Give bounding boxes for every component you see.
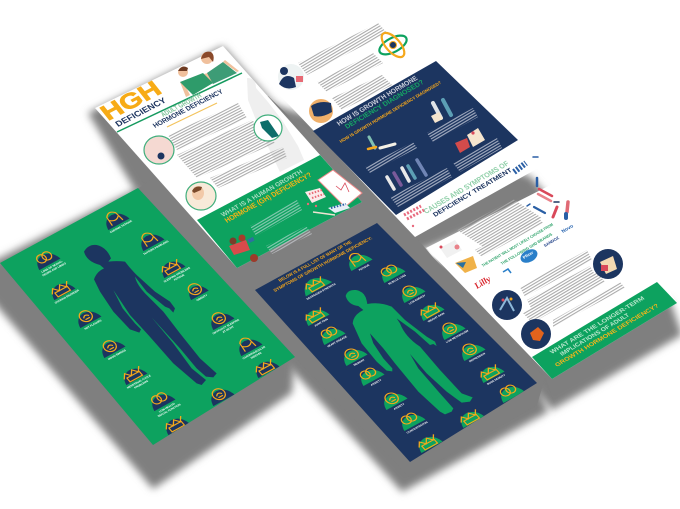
symptom icon 13: MEMORY [352,358,366,367]
symptom icon 10 [102,340,126,360]
symptom icon 15: ANXIETY [393,402,406,411]
illustration: man and woman [178,52,239,97]
symptom icon 13 [166,416,189,435]
symptom icon 7 [480,364,505,385]
symptom icon 1 [348,253,372,271]
panel: top left white page, adult growth hormone deficiency [95,46,362,268]
symptom icon 5: DIFFICULTY SLEEPING [211,318,240,335]
floating pills illustration [514,157,568,218]
panel: navy symptoms page [255,223,537,462]
symptom icon 3: FATIGUE [173,273,186,282]
illustration: family [229,234,258,262]
text block: diagnosis captions [365,108,502,207]
symptom icons [30,207,279,435]
symptom icon 6: DISEASE [250,351,263,360]
symptom icon 6 [239,338,266,360]
symptom icon 1: FATIGUE [358,263,371,272]
symptom icon 2: MUSCLE LOSS [387,273,407,286]
symptom icon 7: DESIRE AND LIBIDO [41,261,67,277]
heading: companies: THE FOLLOWING GHD BRANDS [500,232,554,266]
panel: green section, what is human growth hormone [197,155,362,268]
symptom icon 7: BONE DENSITY [486,373,506,386]
heading [549,296,661,368]
text block: treatment paragraphs [457,199,625,327]
symptom icon 10: MOOD SWINGS [107,348,127,361]
symptom icon 11: MENSTRUAL CYCLE [126,374,152,390]
icon: hospital logos [440,240,462,258]
symptom icon 10 [304,276,336,300]
symptom icon 15 [384,392,408,410]
illustration: report and blood samples [455,128,485,153]
symptom icon 14: ANXIETY [370,378,383,387]
illustration: medical report card [318,170,362,207]
symptom icon 5: AT NIGHT [221,325,235,334]
logo: Pfizer: Pfizer [522,250,535,260]
heading: causes and treatment: DEFICIENCY TREATMENT [432,167,514,219]
icon: lab circle [492,290,522,320]
symptom icon 5 [211,312,240,334]
symptom icon 11 [306,307,330,327]
symptom icon 8: OVARIAN DISORDER [54,289,80,305]
title: HGH Deficiency: HGH [95,76,166,125]
illustration: pale standing figure [247,78,304,172]
icon: organ circle [521,319,551,349]
heading: causes and treatment: CAUSES AND SYMPTOMS OF [422,159,511,216]
symptom icon 4 [420,302,444,322]
silhouette: male body [346,290,473,414]
symptom icon 9: HOT FLASHES [83,318,103,331]
symptom icon 12: SEXUAL FUNCTION [157,403,182,418]
symptom icon 5: LOW METABOLISM [445,329,470,344]
symptom icon 12: HEART DISEASE [326,335,348,348]
heading: adult growth hormone deficiency: HORMONE DEFICIENCY [152,89,225,130]
symptom icon 11 [124,366,152,389]
panel: green band, longer-term implications [532,282,677,379]
panel: navy diagnosis section: DEFICIENCY DIAGNOSED? [344,79,426,131]
symptom icon 7 [36,251,66,276]
heading: companies: THE PATIENT WILL MOST LIKELY CHOOSE FROM [481,222,555,268]
icon: body circle [254,115,282,141]
symptom icon 8 [52,281,80,304]
symptom icon 4: OBESITY [195,293,208,302]
logo: small pharma mark [503,269,511,273]
silhouette: female body [84,245,217,385]
symptom icon 12 [320,326,348,348]
symptom icon 6: DEPRESSION [468,352,486,363]
icon: pink pill card [404,206,424,227]
panel: right white page, treatment and implications [426,165,677,379]
symptom icon 6 [462,344,486,362]
symptom icon 13 [344,348,368,366]
heading: GROWTH HORMONE DEFICIENCY? [554,303,661,368]
heading: WHAT IS A HUMAN GROWTH [220,169,305,219]
symptom icon 8 [500,384,524,403]
heading: SYMPTOMS OF GROWTH HORMONE DEFICIENCY: [272,236,374,293]
logo: Pfizer [518,246,540,266]
text block: intro paragraphs [298,23,392,110]
panel: green section, what is human growth hormone: HORMONE (GH) DEFICIENCY? [223,170,314,225]
symptom icon 4 [188,283,208,301]
symptom icon 17 [418,434,442,453]
panel: green symptoms page [0,188,295,445]
symptom icon 9 [460,409,484,428]
icon: atom [376,29,410,61]
symptom icon 2 [141,232,168,255]
symptom icons [296,248,525,453]
symptom icon 1: CHRONIC FATIGUE [109,219,133,234]
symptom icon 6: CARDIOVASCULAR [241,345,266,360]
panel: navy diagnosis section [313,61,518,215]
logo: Lilly: Lilly [471,274,493,291]
heading: WHAT ARE THE LONGER-TERM [549,296,646,355]
logo: Novo Nordisk: Novo [561,224,575,235]
symptom icon 3 [402,286,426,304]
heading: BELOW IS A FULL LIST OF MANY OF THE [277,240,353,283]
symptom icon 10: DECREASED STRENGTH [305,282,337,301]
symptom icon 2: THYROID PROBLEMS [142,239,170,256]
symptom icon 12: LOW HEALTH [158,402,176,413]
symptom icon 7: LOSS OF SEXUAL [40,259,64,274]
symptom icon 9 [78,310,102,330]
icon: handshake card [455,256,477,273]
symptom icon 16: CONCENTRATION [405,420,429,435]
symptom icon 5 [442,322,468,343]
heading: adult growth hormone deficiency: ADULT GROWTH [160,93,203,119]
text block: adult GHD paragraphs [168,103,287,188]
symptom icon 2 [380,264,406,285]
heading: IMPLICATIONS OF ADULT [559,313,632,357]
icon: brain circle [144,136,174,164]
icon: head circle [309,99,333,123]
symptom icon 1 [106,212,132,233]
text block: hormone description [250,200,312,254]
heading: HOW IS GROWTH HORMONE [336,75,420,128]
symptom icon 11: PROBLEMS [133,379,149,390]
symptom icon 3 [162,259,190,282]
illustration: pill blisters and syringe [305,188,350,215]
icon: doctor [278,64,304,90]
symptom icon 14 [211,388,234,406]
panel: top right white page, diagnosis [273,17,540,237]
symptom icon 16 [400,412,428,434]
icon: face circle [186,182,216,210]
symptom icon 4: WEIGHT GAIN [427,312,445,323]
symptom icon 12 [150,392,181,417]
title: HGH Deficiency [95,76,169,129]
symptom icon 3: SLEEPING PROBLEMS [163,266,191,283]
illustration: medical team [387,160,426,189]
panel: navy diagnosis section: HOW IS GROWTH HORMONE DEFICIENCY DIAGNOSED? [339,80,442,144]
symptom icon 15 [256,359,280,378]
symptom icon 3: LOW ENERGY [408,293,427,305]
symptom icon 14 [360,368,384,386]
icon: pills circle [593,249,623,279]
illustration: blood test arm [368,137,395,149]
title: HGH Deficiency: DEFICIENCY [113,95,169,129]
logo: Sandoz: SANDOZ [543,235,561,248]
illustration: two doctors [431,100,451,123]
green rule [117,73,242,132]
symptom icon 11: JOINT PAIN [313,317,329,327]
